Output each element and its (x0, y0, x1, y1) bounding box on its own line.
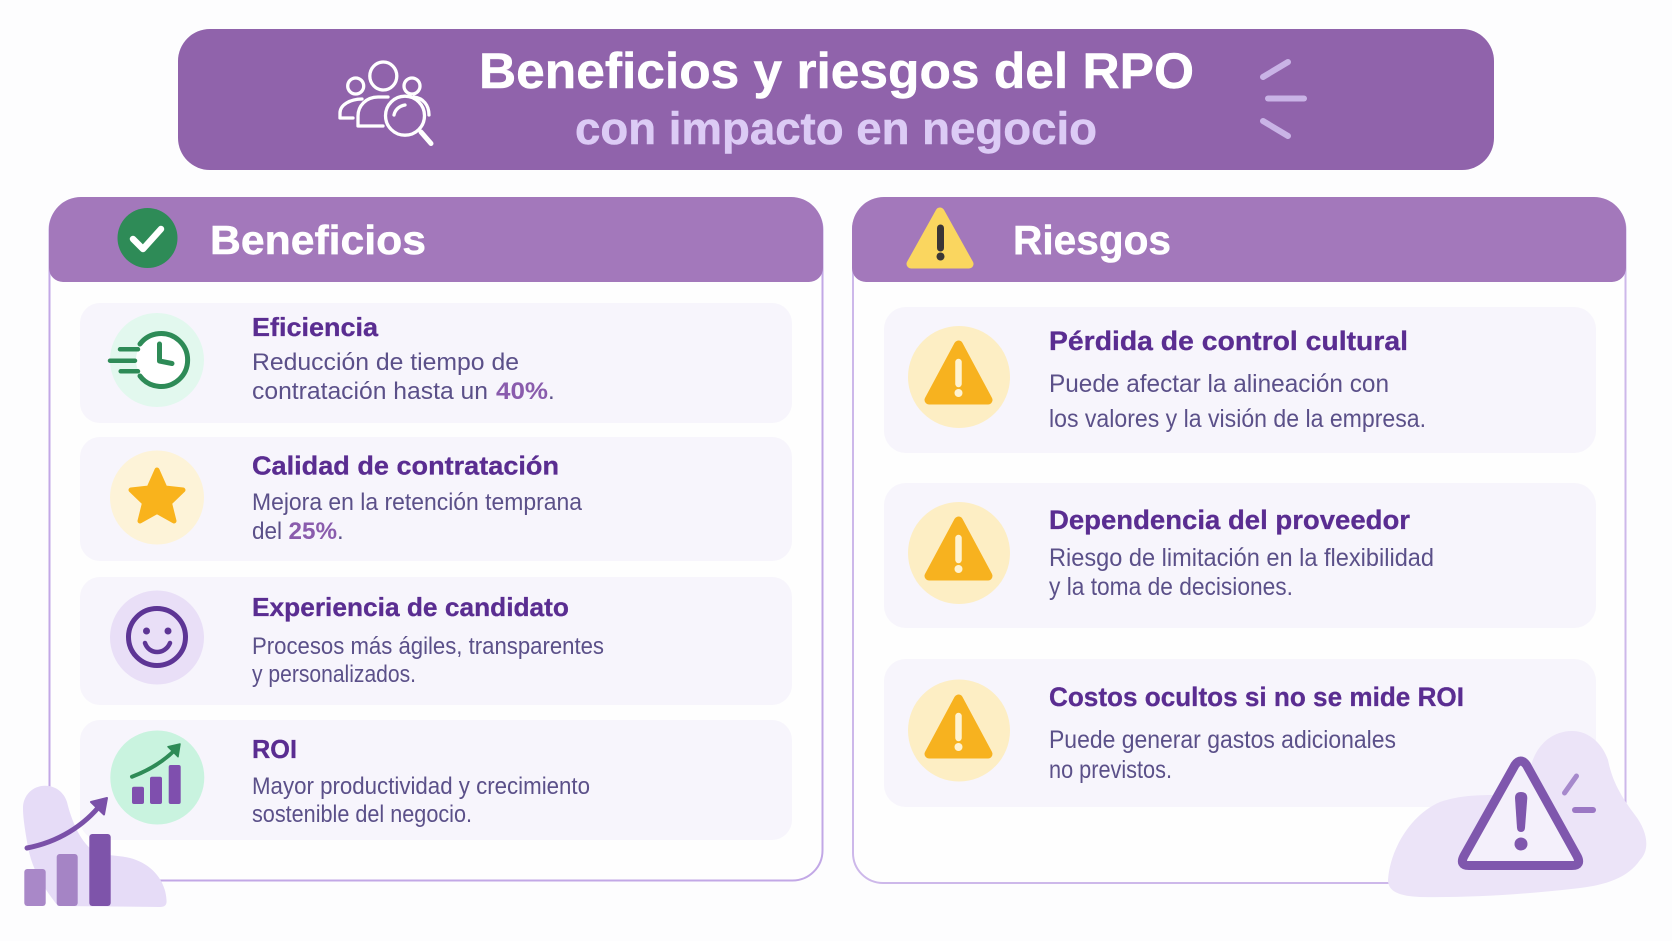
text: perdida (1049, 326, 1426, 433)
text: costos: no previstos. (1049, 756, 1172, 784)
text: calidad (252, 450, 583, 545)
panel frame (853, 200, 1626, 883)
card: costos ocultos (884, 659, 1596, 807)
card: perdida de control cultural (884, 307, 1596, 453)
panel frame (50, 200, 822, 880)
panel heading: Riesgos (1013, 217, 1171, 263)
text: costos: Costos ocultos si no se mide ROI (1049, 682, 1464, 712)
panel header (49, 197, 823, 282)
text: eficiencia: contratación hasta un (252, 378, 488, 405)
text: eficiencia: Eficiencia (252, 312, 379, 342)
text: eficiencia: . (548, 378, 555, 405)
decorative rays (1263, 62, 1304, 136)
icon: amber warning (908, 326, 1010, 428)
title banner (178, 29, 1494, 170)
text: experiencia: Procesos más ágiles, transparentes (252, 633, 604, 660)
text: eficiencia: Reducción de tiempo de (252, 349, 519, 376)
text: roi: ROI (252, 734, 297, 764)
illustration: warning with blob (1388, 731, 1646, 897)
text: calidad: Mejora en la retención temprana (252, 489, 583, 516)
card: roi (80, 720, 792, 840)
subtitle text: con impacto en negocio (575, 103, 1097, 154)
text: dependencia: Riesgo de limitación en la flexibilidad (1049, 544, 1434, 572)
text: calidad: Calidad de contratación (252, 450, 559, 480)
text: eficiencia (252, 312, 555, 405)
text: calidad: . (337, 518, 344, 545)
card: calidad de contratacion (80, 437, 792, 561)
text: perdida: Pérdida de control cultural (1049, 326, 1408, 356)
card: eficiencia (80, 303, 792, 423)
text: costos (1049, 682, 1464, 784)
icon: smile (128, 608, 186, 666)
text: perdida: Puede afectar la alineación con (1049, 370, 1389, 398)
icon: people with magnifier (340, 62, 431, 144)
text: roi: Mayor productividad y crecimiento (252, 773, 590, 800)
text: dependencia (1049, 505, 1434, 601)
icon: growth chart (132, 744, 181, 804)
icon: clock (110, 334, 188, 386)
text: calidad: 25% (288, 518, 337, 545)
panel: beneficios (49, 197, 823, 880)
icon: amber warning (908, 680, 1010, 782)
icon: star (131, 470, 183, 521)
text: eficiencia: 40% (496, 378, 548, 405)
title text: Beneficios y riesgos del RPO (479, 43, 1194, 99)
text: experiencia: Experiencia de candidato (252, 592, 569, 622)
text: dependencia: Dependencia del proveedor (1049, 505, 1410, 535)
text: roi (252, 734, 590, 828)
icon: amber warning (908, 502, 1010, 604)
icon: green check (118, 208, 178, 268)
card: experiencia de candidato (80, 577, 792, 705)
text: calidad: del (252, 518, 282, 545)
text: experiencia (252, 592, 604, 688)
icon: yellow warning (911, 212, 969, 264)
panel header (852, 197, 1626, 282)
panel: riesgos (852, 197, 1626, 883)
text: costos: Puede generar gastos adicionales (1049, 726, 1396, 754)
text: dependencia: y la toma de decisiones. (1049, 573, 1293, 601)
text: perdida: los valores y la visión de la empresa. (1049, 405, 1426, 433)
illustration: bar chart with arrow (23, 786, 167, 907)
text: roi: sostenible del negocio. (252, 801, 472, 828)
card: dependencia del proveedor (884, 483, 1596, 628)
panel heading: Beneficios (210, 217, 426, 263)
text: experiencia: y personalizados. (252, 661, 416, 688)
